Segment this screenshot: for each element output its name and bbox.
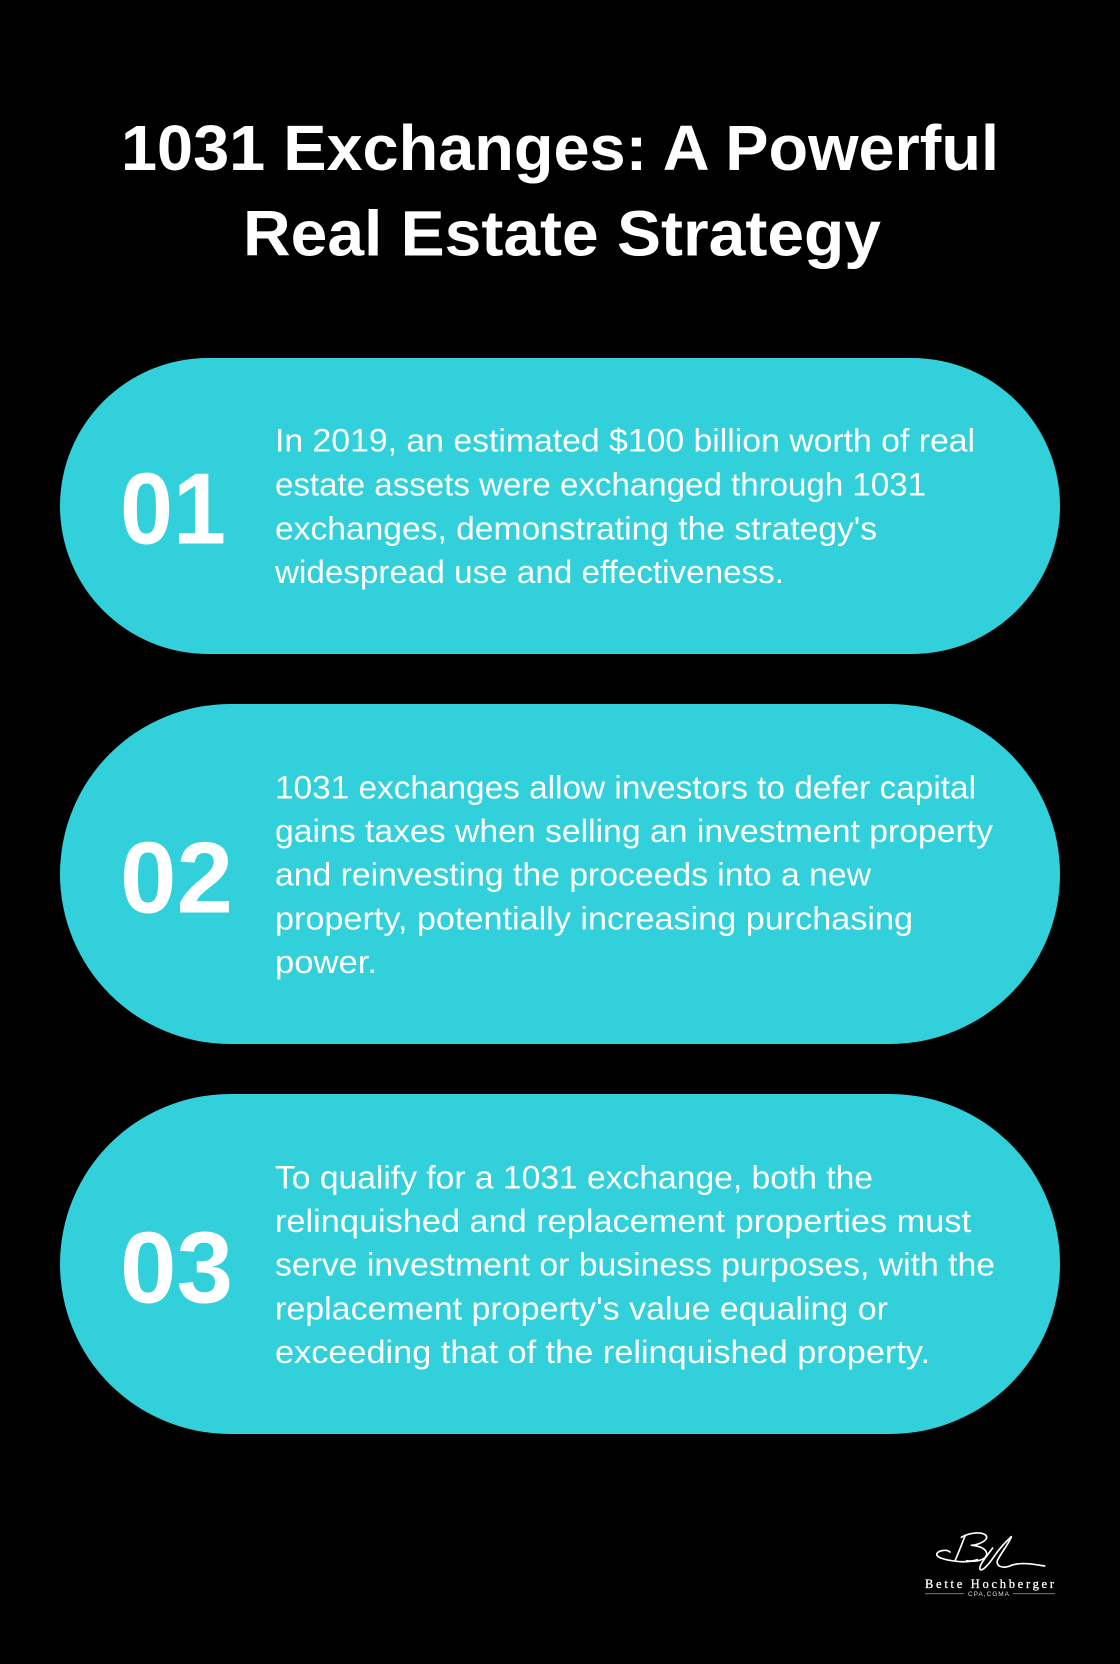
number 01: 01 (120, 454, 226, 566)
number 02: 02 (120, 822, 233, 934)
panel: statistic 03 (60, 1094, 1060, 1434)
text block 03 (275, 1159, 995, 1370)
text block 01: widespread use and effectiveness. (274, 554, 784, 590)
text block 03: serve investment or business purposes, with the (275, 1247, 995, 1283)
text block 03: relinquished and replacement properties must (275, 1203, 971, 1239)
title (121, 112, 999, 270)
text block 03: replacement property's value equaling or (275, 1290, 888, 1326)
logo name: Bette Hochberger (925, 1577, 1055, 1591)
panel: statistic 02 (60, 704, 1060, 1044)
text block 02: and reinvesting the proceeds into a new (275, 857, 872, 893)
logo credentials: CPA,CGMA (968, 1591, 1010, 1598)
text block 02: property, potentially increasing purchasing (275, 900, 913, 936)
logo: Bette Hochberger signature (925, 1533, 1055, 1598)
text block 01 (274, 423, 975, 590)
title: Real Estate Strategy (243, 198, 881, 270)
title: 1031 Exchanges: A Powerful (121, 112, 999, 184)
text block 01: exchanges, demonstrating the strategy's (275, 510, 877, 546)
text block 03: exceeding that of the relinquished property. (275, 1334, 930, 1370)
text block 02: 1031 exchanges allow investors to defer capital (275, 769, 976, 805)
text block 02 (275, 769, 994, 980)
number 03: 03 (120, 1212, 233, 1324)
text block 01: In 2019, an estimated $100 billion worth of real (275, 423, 975, 459)
panel: statistic 01 (60, 358, 1060, 654)
text block 02: gains taxes when selling an investment property (275, 813, 994, 849)
text block 03: To qualify for a 1031 exchange, both the (275, 1159, 873, 1195)
icon: BH signature (937, 1533, 1045, 1570)
text block 02: power. (275, 944, 377, 980)
text block 01: estate assets were exchanged through 1031 (275, 466, 926, 502)
